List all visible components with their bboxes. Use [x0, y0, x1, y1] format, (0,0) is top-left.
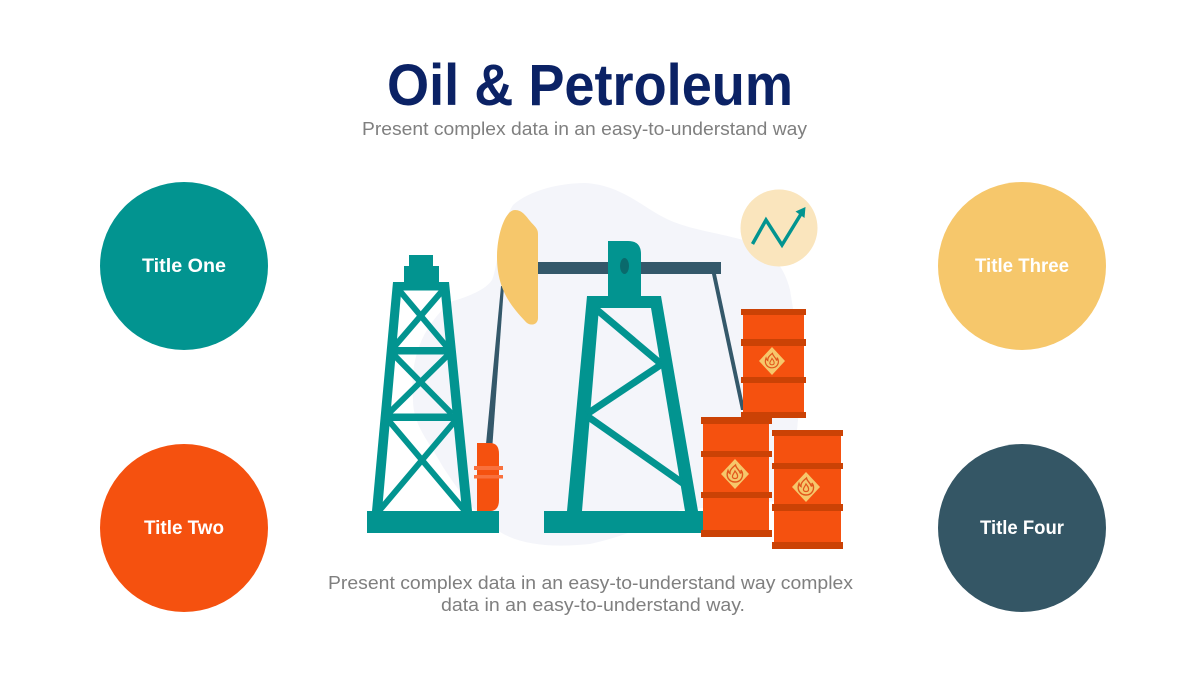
- panel: title one circle: [100, 182, 268, 350]
- icon: barrel right: [772, 430, 843, 549]
- panel: title two circle: [100, 444, 268, 612]
- illustration: oil field: [367, 183, 843, 549]
- icon: pump tower: [544, 241, 704, 533]
- icon: plunger: [474, 443, 503, 511]
- icon: barrel left: [701, 417, 772, 537]
- icon: left derrick: [367, 255, 499, 533]
- body text: [328, 573, 853, 615]
- icon: horse head weight: [497, 210, 538, 325]
- icon: polished rod: [486, 286, 504, 444]
- panel: title two circle: Title Two: [144, 518, 224, 539]
- icon: pump walking beam: [535, 262, 721, 274]
- panel: title four circle: Title Four: [980, 518, 1065, 539]
- icon: rising chart badge: [740, 190, 818, 266]
- panel: title three circle: [938, 182, 1106, 350]
- panel: title four circle: [938, 444, 1106, 612]
- title: Oil & Petroleum: [387, 53, 793, 118]
- body text: data in an easy-to-understand way.: [441, 595, 745, 615]
- subtitle: Present complex data in an easy-to-understand way: [362, 119, 807, 139]
- panel: title one circle: Title One: [142, 256, 226, 277]
- background blob: [412, 183, 800, 546]
- icon: stacked barrel top: [741, 309, 806, 418]
- body text: Present complex data in an easy-to-understand way complex: [328, 573, 853, 593]
- panel: title three circle: Title Three: [975, 256, 1069, 277]
- icon: right support rod: [712, 274, 745, 410]
